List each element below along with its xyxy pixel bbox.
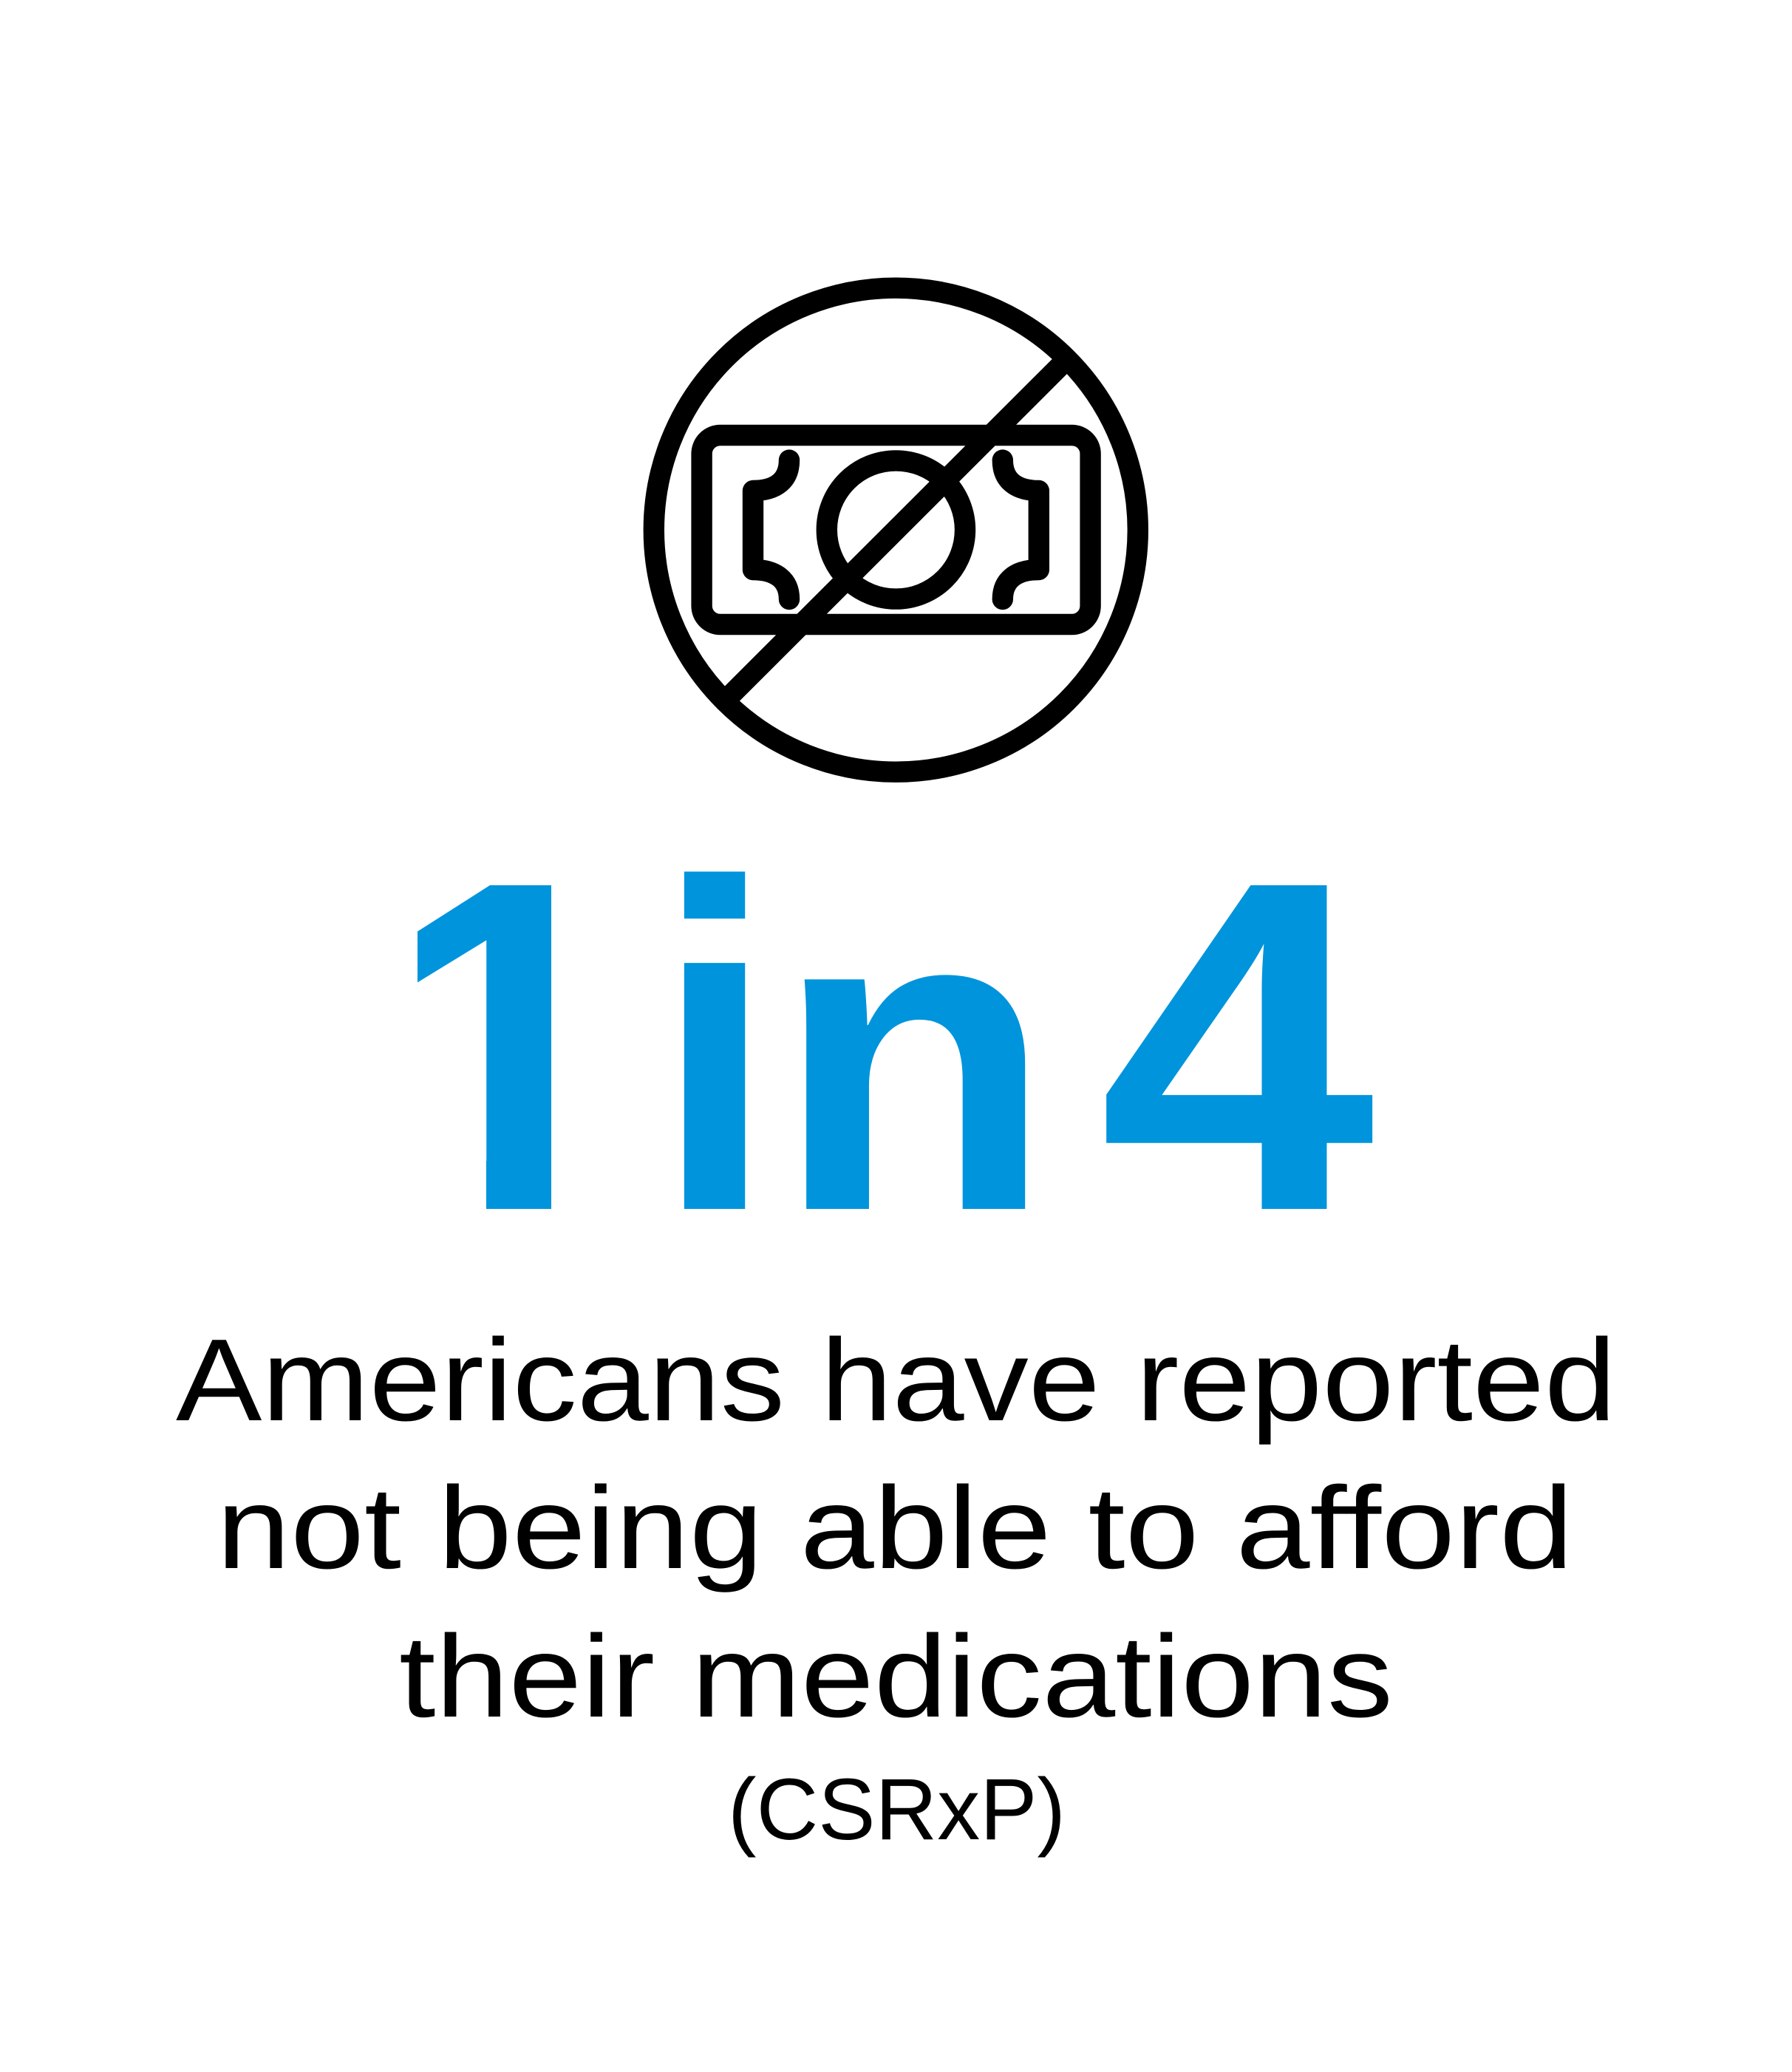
headline statistic: 1 in 4: 4 [1099, 783, 1378, 1309]
headline statistic: 1 in 4: 1 [375, 784, 641, 1309]
icon: crossed-out dollar bill [654, 288, 1138, 772]
headline statistic: 1 in 4: i [653, 788, 777, 1308]
headline statistic: 1 in 4: n [774, 816, 1054, 1301]
description text: not being able to afford [217, 1463, 1573, 1593]
source citation: (CSRxP) [728, 1761, 1066, 1858]
description text [176, 1315, 1616, 1742]
headline statistic: 1 in 4 [375, 783, 1378, 1309]
description text: Americans have reported [176, 1315, 1616, 1445]
description text: their medications [399, 1612, 1393, 1742]
